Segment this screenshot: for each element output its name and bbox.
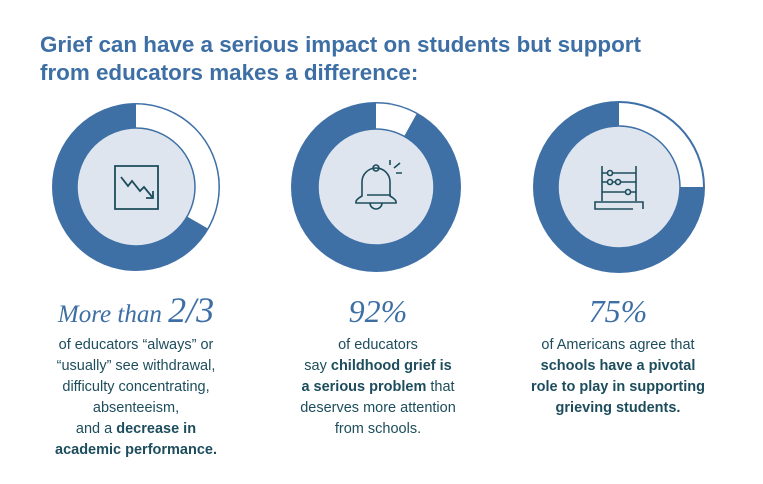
stat: more than 2/3: academic performance. xyxy=(55,442,217,458)
stat: 75%: schools have a pivotal xyxy=(541,358,695,374)
stat: more than 2/3 xyxy=(55,290,217,458)
title xyxy=(40,32,641,85)
stat: more than 2/3: “usually” see withdrawal, xyxy=(57,358,215,374)
stat: 75%: role to play in supporting xyxy=(531,379,705,395)
stat: 92%: say childhood grief is xyxy=(304,358,452,374)
stat: 92%: from schools. xyxy=(335,421,421,437)
donut chart: 92% xyxy=(291,102,461,272)
title: Grief can have a serious impact on students but support xyxy=(40,32,641,57)
stat: 92%: of educators xyxy=(338,337,418,353)
donut chart: more than 2/3 xyxy=(52,103,220,271)
stat: 92%: deserves more attention xyxy=(300,400,456,416)
stat: 92% xyxy=(300,293,456,437)
icon: declining chart xyxy=(115,166,158,209)
donut chart: 75% xyxy=(533,101,705,273)
stat: 75%: of Americans agree that xyxy=(541,337,695,353)
stat: more than 2/3: of educators “always” or xyxy=(59,337,214,353)
stat: 92%: a serious problem that xyxy=(301,379,455,395)
stat: more than 2/3: More than 2/3 xyxy=(57,290,214,330)
stat: 75%: grieving students. xyxy=(556,400,680,416)
stat: more than 2/3: and a decrease in xyxy=(76,421,196,437)
stat: 92%: 92% xyxy=(349,293,407,329)
stat: 75%: 75% xyxy=(589,293,647,329)
icon: bell xyxy=(356,160,402,209)
stat: more than 2/3: absenteeism, xyxy=(93,400,179,416)
stat: more than 2/3: difficulty concentrating, xyxy=(62,379,210,395)
icon: abacus xyxy=(595,166,643,209)
title: from educators makes a difference: xyxy=(40,60,418,85)
stat: 75% xyxy=(531,293,705,416)
